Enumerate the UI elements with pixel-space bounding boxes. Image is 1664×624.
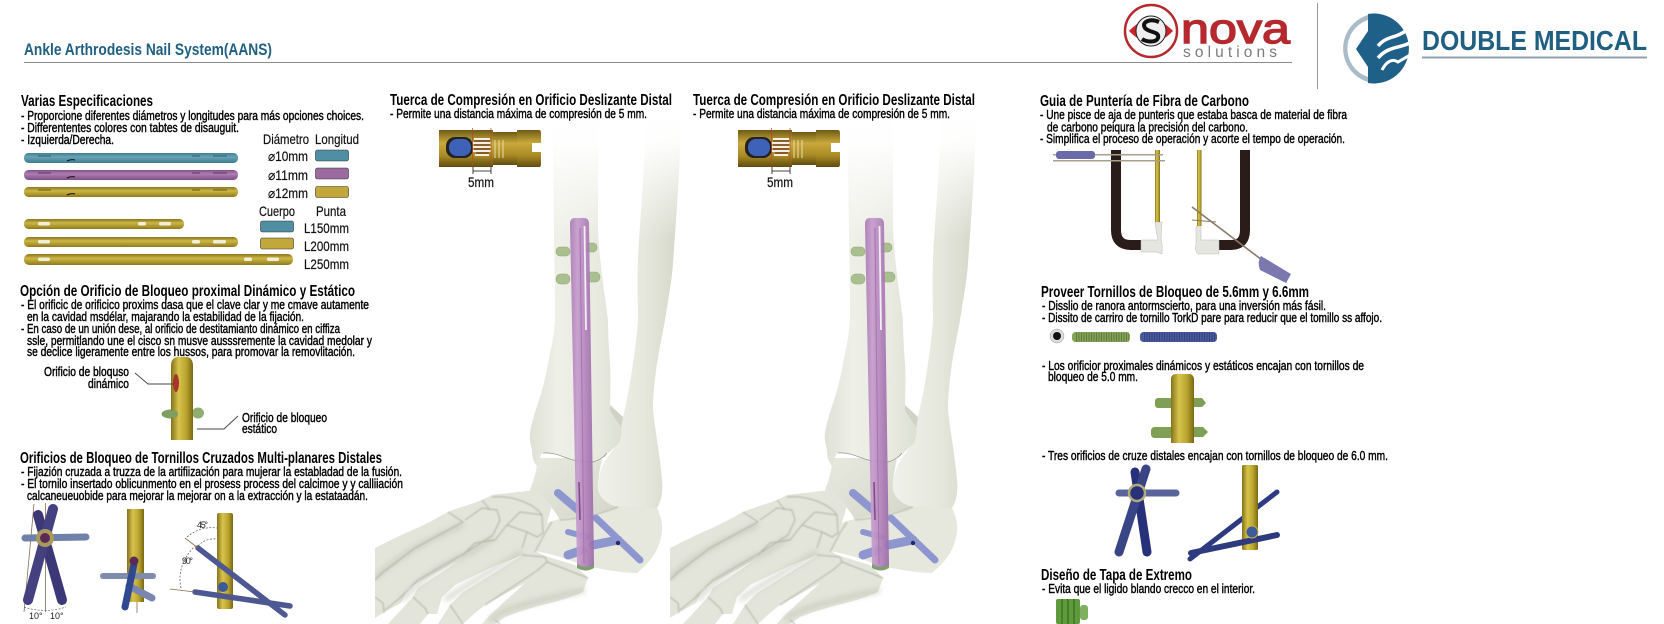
heading: Tuerca de Compresión en Orificio Deslizante Distal <box>390 92 672 109</box>
label: static hole: Orificio de bloqueo <box>242 411 327 425</box>
text block <box>21 109 364 147</box>
heading: Tuerca de Compresión en Orificio Deslizante Distal <box>693 92 975 109</box>
heading: Guia de Puntería de Fibra de Carbono <box>1040 93 1249 110</box>
heading: Proveer Tornillos de Bloqueo de 5.6mm y 6.6mm <box>1041 284 1309 301</box>
panel: tuerca de compresion 2 <box>693 92 975 190</box>
panel: tornillos cruzados distales <box>20 450 403 621</box>
illustration: nail with oblique screws <box>1190 465 1277 559</box>
label: static hole: estático <box>242 422 277 436</box>
logo: double medical <box>1343 13 1647 83</box>
text block: calcaneueuobide para mejorar la mejorar on a la extracción y la estataadán. <box>27 489 368 503</box>
label: dynamic hole: dinámico <box>88 377 129 391</box>
icon: screw head <box>1050 329 1064 343</box>
illustration: crossed screws top view: 10° <box>50 611 64 621</box>
illustration: proximal nail <box>162 357 204 440</box>
legend: diameter and length: ⌀12mm <box>268 185 308 201</box>
text: proximal holes: - Los orificior proximales dinámicos y estáticos encajan con tornillos de <box>1042 359 1364 373</box>
logo: nova solutions: solutions <box>1183 44 1277 61</box>
text: - Evita que el ligido blando crecco en el interior. <box>1042 582 1255 596</box>
heading: Opción de Orificio de Bloqueo proximal Dinámico y Estático <box>20 283 355 300</box>
text block: - En caso de un unión dese, al orificio de destitamianto dinámico en ciffiza <box>21 322 340 336</box>
text block: - Proporcione diferentes diámetros y longitudes para más opciones choices. <box>21 109 364 123</box>
illustration: carbon fibre guide left <box>1053 150 1165 254</box>
text block <box>1042 299 1382 325</box>
compression nut <box>439 128 541 190</box>
legend: diameter and length <box>263 131 359 201</box>
text block <box>1040 108 1347 146</box>
bone: talus <box>530 458 618 520</box>
legend: body and tip: L250mm <box>304 256 349 272</box>
text block: - Dissito de carriro de tornillo TorkD pare para reducir que el tomillo ss affojo. <box>1042 311 1382 325</box>
label: static hole <box>197 411 327 436</box>
logo divider <box>1317 3 1318 89</box>
logo: nova solutions: nova <box>1181 5 1291 52</box>
illustration: end cap <box>1056 599 1088 624</box>
label: dynamic hole: Orificio de bloquso <box>44 365 129 379</box>
green locking screws <box>556 243 600 284</box>
label: dynamic hole <box>44 365 174 391</box>
panel: tornillos de bloqueo <box>1041 284 1388 559</box>
text: - Permite una distancia máxima de compresión de 5 mm. <box>693 107 950 121</box>
icon: blue screw <box>1140 332 1217 342</box>
nails by length <box>24 219 293 265</box>
legend: body and tip: Cuerpo <box>259 203 295 219</box>
top fade <box>530 110 695 240</box>
panel: orificio de bloqueo proximal <box>20 283 373 440</box>
text block <box>21 465 403 503</box>
text block: - El tornilo insertado oblicunmento en el prosess process del calcimoe y y calliiación <box>21 477 403 491</box>
white gaps <box>375 555 525 624</box>
text: - Permite una distancia máxima de compresión de 5 mm. <box>390 107 647 121</box>
text block <box>21 298 373 359</box>
text block: - Fijazión cruzada a truzza de la artifiización para mujerar la establadad de la fusión. <box>21 465 402 479</box>
legend: diameter and length: ⌀10mm <box>268 148 308 164</box>
text block: - El orificic de orificico proxims dasa que el clave clar y me cmave autamente <box>21 298 369 312</box>
illustration: carbon fibre guide right <box>1192 150 1291 283</box>
compression nut <box>738 128 840 190</box>
illustration: nail with angle markers <box>170 513 290 615</box>
icon: green screw <box>1072 332 1130 342</box>
illustration: nail with angle markers: 45° <box>197 520 208 530</box>
purple nail <box>570 218 620 570</box>
legend: diameter and length: Longitud <box>315 131 359 147</box>
legend: body and tip: L200mm <box>304 238 349 254</box>
panel: varias especificaciones <box>21 93 364 272</box>
text block: - Disslio de ranora antormscierto, para una inversión más fásil. <box>1042 299 1326 313</box>
logo: nova solutions <box>1125 5 1291 61</box>
legend: body and tip: Punta <box>316 203 346 219</box>
illustration: proximal nail with screws <box>1151 374 1208 443</box>
heading: Orificios de Bloqueo de Tornillos Cruzados Multi-planares Distales <box>20 450 382 467</box>
text block: - Izquierda/Derecha. <box>21 133 114 147</box>
ankle illustration 2 <box>670 110 990 624</box>
illustration: crossed screws top view: 10° <box>29 611 43 621</box>
text block: - Simplifica el proceso de operación y acorte el tempo de operación. <box>1040 132 1345 146</box>
bone: fibula <box>598 120 681 509</box>
legend: diameter and length: Diámetro <box>263 131 309 147</box>
ankle illustration 1 <box>375 110 695 624</box>
panel: guia de punteria <box>1040 93 1347 283</box>
broad shading <box>375 525 585 620</box>
legend: body and tip: L150mm <box>304 220 349 236</box>
illustration: crossed screws <box>1119 469 1176 552</box>
text block: se declice ligeramente entre los hussos, para promovar la removlitación. <box>27 345 355 359</box>
panel: tapa de extremo <box>1041 567 1255 624</box>
text block: - Une pisce de aja de punteris que estaba basca de material de fibra <box>1040 108 1347 122</box>
bone: calcaneus <box>535 506 662 573</box>
title: Ankle Arthrodesis Nail System(AANS) <box>24 41 272 59</box>
header rule <box>24 62 1292 63</box>
nails by diameter <box>24 153 238 197</box>
illustration: nail with oblique screws <box>103 509 153 613</box>
text: proximal holes: bloqueo de 5.0 mm. <box>1048 370 1138 384</box>
heading: Varias Especificaciones <box>21 93 153 110</box>
legend: body and tip <box>259 203 349 272</box>
panel: tuerca de compresion 1 <box>390 92 672 190</box>
legend: diameter and length: ⌀11mm <box>268 167 308 183</box>
joint lines <box>375 497 618 624</box>
illustration: crossed screws top view <box>24 503 86 621</box>
heading: Diseño de Tapa de Extremo <box>1041 567 1192 584</box>
bones: forefoot <box>375 490 618 624</box>
text block: - Differententes colores con tabtes de disauguit. <box>21 121 239 135</box>
illustration: nail with angle markers: 90° <box>182 556 193 566</box>
text: distal holes: - Tres orificios de cruze distales encajan con tornillos de bloqueo de 6.0 mm. <box>1042 449 1388 463</box>
compression nut: 5mm <box>468 174 494 190</box>
text block: ssle, permitlando une el cisco sn musve ausssremente la cavidad medolar y <box>27 334 373 348</box>
blue locking screws <box>558 493 640 560</box>
text block: en la cavidad msdélar, majarando la estabilidad de la fijación. <box>27 310 304 324</box>
bone: tibia <box>530 120 623 467</box>
text: proximal holes <box>1042 359 1364 384</box>
text block: de carbono peiqura la precisión del carbono. <box>1047 120 1248 134</box>
